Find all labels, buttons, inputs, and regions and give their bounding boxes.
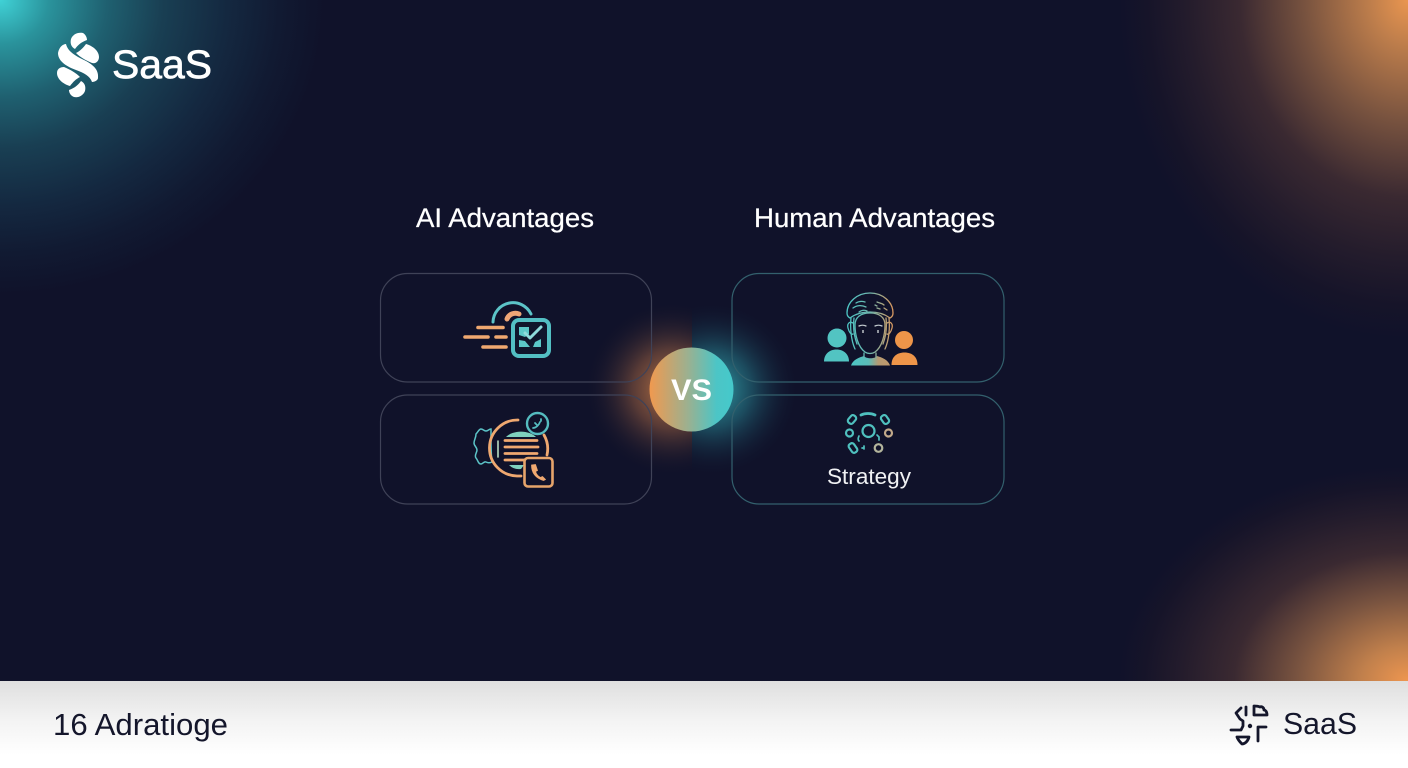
logo: top left bbox=[57, 33, 212, 97]
panel: AI speed card bbox=[380, 274, 652, 382]
icon: S logo mark bbox=[57, 33, 99, 97]
panel: human empathy card bbox=[732, 274, 1004, 382]
heading: Human Advantages: Human Advantages bbox=[754, 203, 995, 233]
footer bbox=[0, 681, 1408, 768]
icon: support with phone bbox=[474, 413, 552, 486]
panel: human strategy card bbox=[732, 395, 1004, 504]
wordmark: SaaS bbox=[112, 43, 212, 87]
footer wordmark: SaaS bbox=[1283, 707, 1357, 741]
VS glow bbox=[600, 317, 782, 460]
VS badge: VS bbox=[671, 374, 712, 407]
icon: footer brain mark bbox=[1231, 706, 1267, 744]
icon: strategy ring bbox=[846, 414, 892, 454]
icon: speed and checklist bbox=[465, 303, 549, 356]
heading: AI Advantages: AI Advantages bbox=[416, 203, 594, 233]
panel: AI support card bbox=[380, 395, 652, 504]
label: Strategy: Strategy bbox=[827, 464, 912, 489]
footer caption: 16 Adratioge bbox=[53, 708, 228, 742]
icon: people and face bbox=[824, 293, 918, 366]
VS badge bbox=[650, 348, 734, 432]
